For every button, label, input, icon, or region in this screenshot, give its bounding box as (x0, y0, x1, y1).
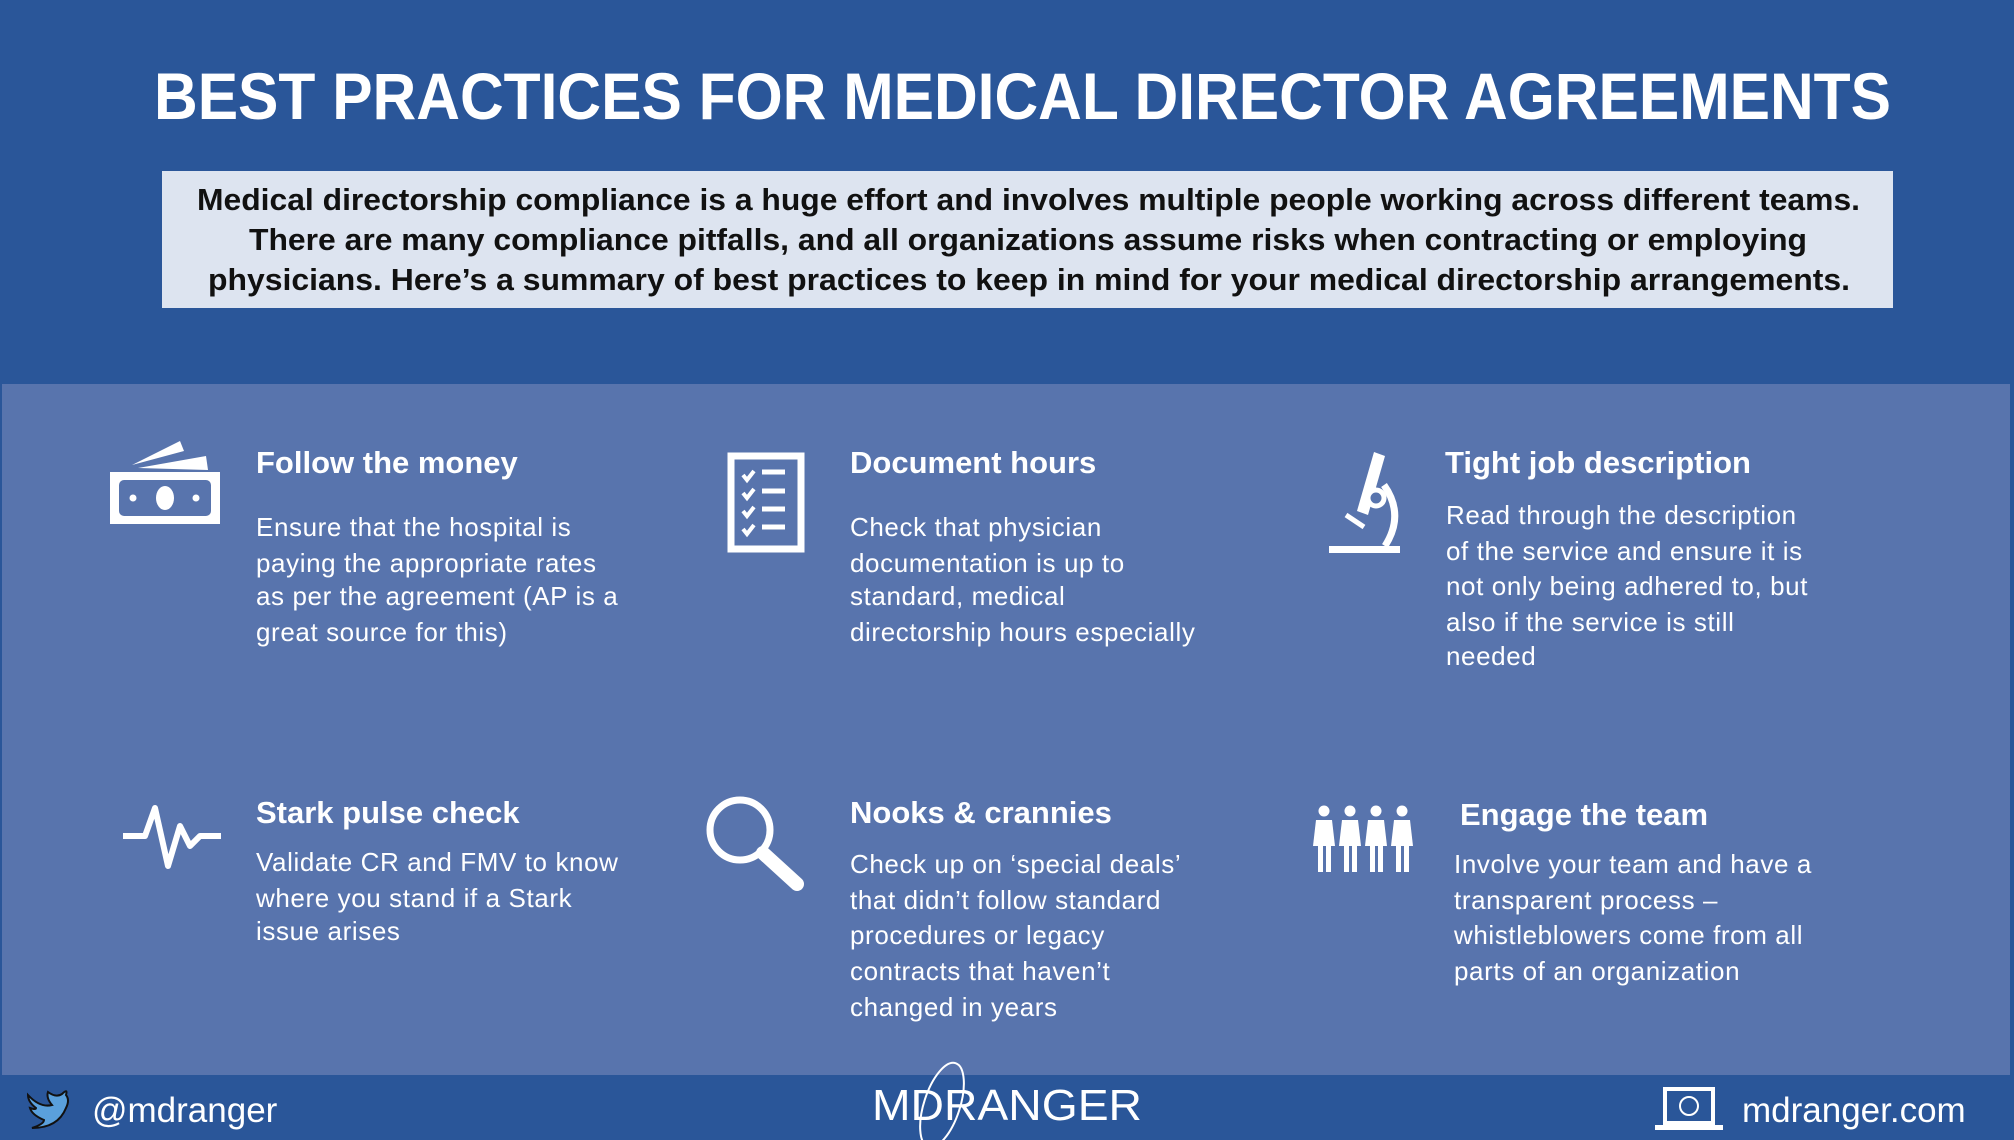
item: stark pulse check: where you stand if a Stark (255, 883, 573, 913)
item: follow the money (256, 445, 618, 647)
item: tight job description: also if the service is still (1446, 607, 1734, 637)
icon: pulse (123, 808, 221, 866)
item: follow the money: Follow the money (256, 445, 519, 480)
item: stark pulse check: issue arises (256, 916, 400, 946)
item: nooks and crannies (850, 795, 1181, 1022)
item: engage the team: Engage the team (1460, 797, 1708, 832)
intro text box: There are many compliance pitfalls, and all organizations assume risks when contracting or employing (249, 222, 1807, 257)
item: engage the team: whistleblowers come from all (1453, 920, 1803, 950)
item: stark pulse check: Validate CR and FMV to know (256, 847, 619, 877)
item: nooks and crannies: Check up on ‘special deals’ (850, 849, 1181, 879)
item: document hours: standard, medical (850, 581, 1065, 611)
item: document hours: documentation is up to (850, 548, 1125, 578)
title: BEST PRACTICES FOR MEDICAL DIRECTOR AGREEMENTS (154, 59, 1891, 133)
item: stark pulse check (255, 795, 619, 946)
footer: website (1655, 1089, 1966, 1130)
icon: money (110, 441, 220, 524)
item: tight job description: not only being adhered to, but (1446, 571, 1808, 601)
item: nooks and crannies: changed in years (850, 992, 1058, 1022)
item: follow the money: Ensure that the hospital is (256, 512, 571, 542)
item: nooks and crannies: procedures or legacy (850, 920, 1105, 950)
item: tight job description: Tight job description (1445, 445, 1751, 480)
item: document hours: directorship hours especially (850, 617, 1195, 647)
item: nooks and crannies: that didn’t follow standard (850, 885, 1161, 915)
icon: checklist (731, 456, 801, 549)
footer: logo (872, 1058, 1142, 1140)
item: nooks and crannies: contracts that haven’t (850, 956, 1111, 986)
item: document hours: Document hours (850, 445, 1096, 480)
item: tight job description: needed (1446, 641, 1536, 671)
footer: website: mdranger.com (1742, 1091, 1966, 1130)
intro text box: physicians. Here’s a summary of best practices to keep in mind for your medical directorship arrangements. (208, 262, 1850, 297)
intro text box: Medical directorship compliance is a huge effort and involves multiple people working across different teams. (197, 182, 1860, 217)
item: tight job description: of the service and ensure it is (1446, 536, 1803, 566)
icon: microscope (1329, 452, 1400, 553)
item: follow the money: as per the agreement (AP is a (256, 581, 618, 611)
footer: logo: MDRANGER (872, 1081, 1142, 1130)
item: nooks and crannies: Nooks & crannies (850, 795, 1112, 830)
item: engage the team: parts of an organization (1454, 956, 1740, 986)
content panel (2, 384, 2010, 1075)
item: document hours: Check that physician (850, 512, 1102, 542)
item: tight job description: Read through the description (1446, 500, 1797, 530)
item: engage the team (1453, 797, 1812, 986)
intro text box (162, 171, 1893, 308)
item: document hours (850, 445, 1195, 647)
icon: team (1313, 806, 1413, 872)
item: follow the money: paying the appropriate rates (256, 548, 597, 578)
item: tight job description (1445, 445, 1808, 671)
icon: magnifier (710, 800, 797, 884)
item: follow the money: great source for this) (256, 617, 508, 647)
item: stark pulse check: Stark pulse check (256, 795, 520, 830)
item: engage the team: Involve your team and have a (1454, 849, 1812, 879)
footer: twitter: @mdranger (92, 1091, 278, 1130)
item: engage the team: transparent process – (1454, 885, 1718, 915)
